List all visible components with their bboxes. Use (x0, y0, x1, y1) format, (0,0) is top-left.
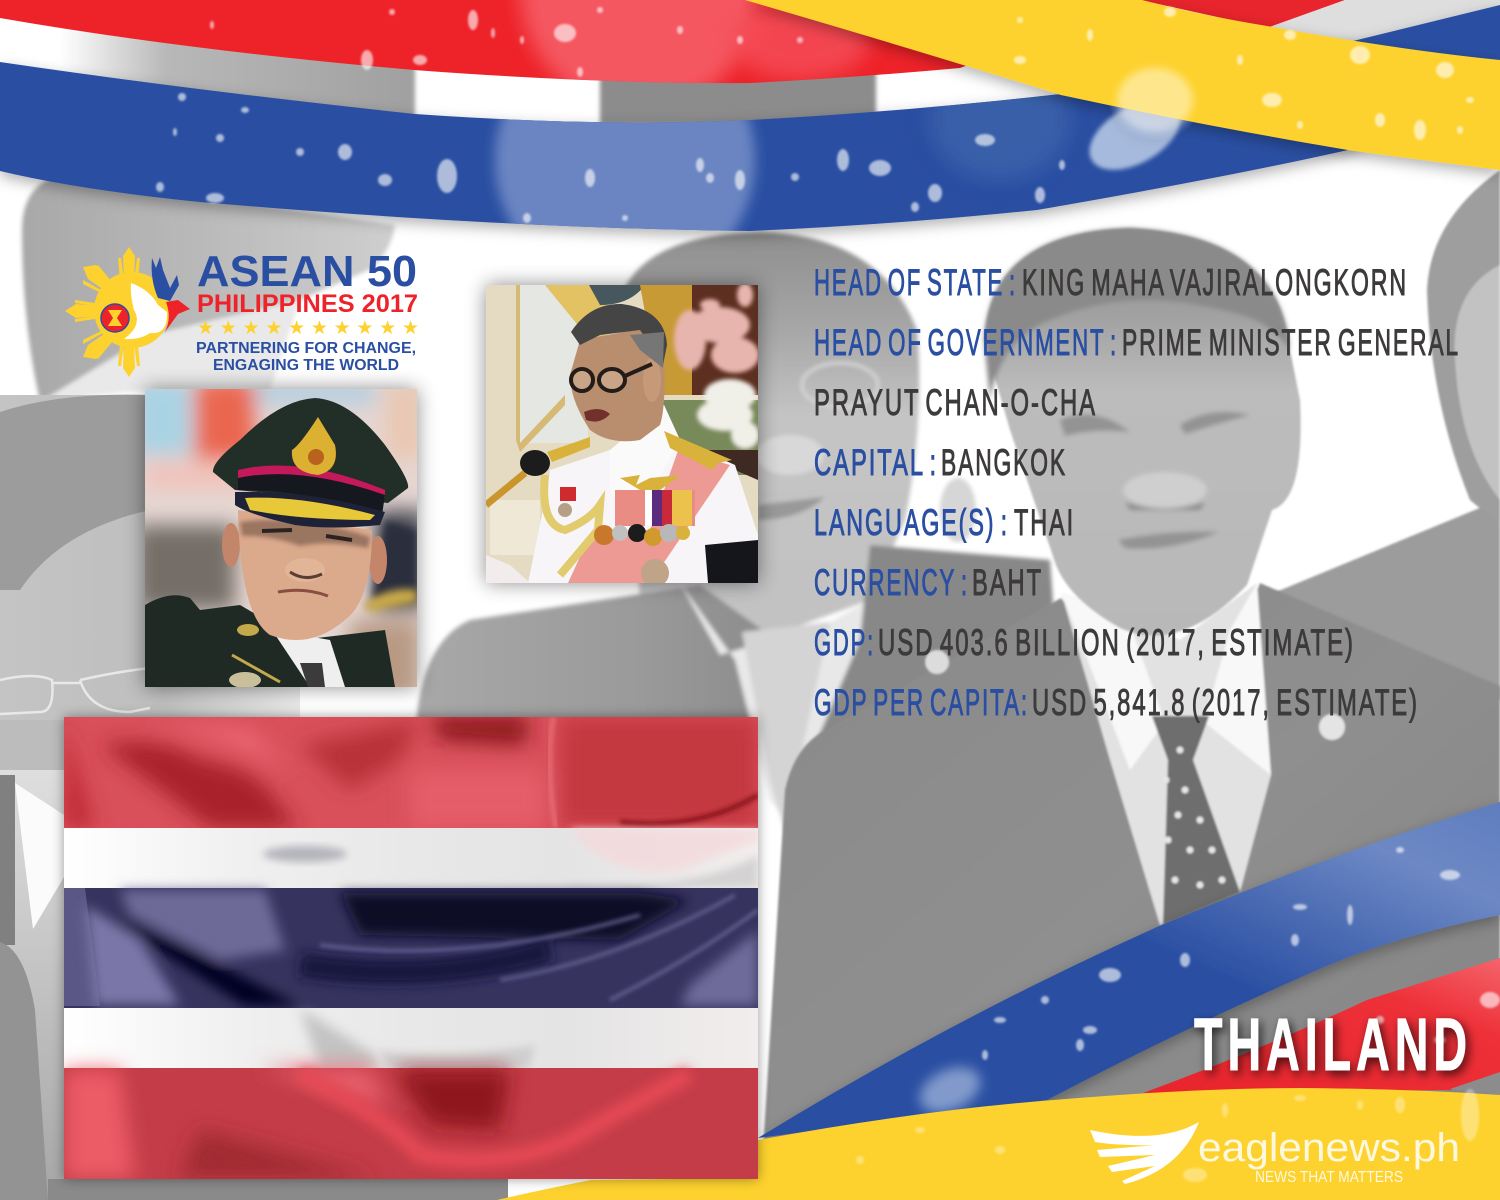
aiguillette (544, 475, 600, 575)
logo stars: ★★★★★★★★★★ (197, 317, 419, 339)
paper (486, 555, 530, 583)
neck and face (570, 325, 665, 441)
features (1060, 412, 1250, 549)
languages: THAI (1014, 502, 1075, 543)
red ribbon (0, 0, 966, 84)
microphone (520, 450, 550, 476)
cap (213, 398, 408, 503)
eaglenews.ph wordmark: eaglenews.ph (1198, 1126, 1460, 1170)
tie (1152, 716, 1240, 925)
confetti (156, 7, 1474, 223)
capital: BANGKOK (941, 442, 1067, 483)
icon: eagle wing (1090, 1122, 1199, 1184)
blue ribbon (758, 802, 1500, 1138)
black armband (705, 540, 758, 583)
Eagle News logo (1090, 1122, 1460, 1186)
head of government: HEAD OF GOVERNMENT : (814, 322, 1118, 363)
sash (568, 445, 730, 583)
logo text: Philippines 2017: PHILIPPINES 2017 (197, 290, 418, 318)
lower white stripe (64, 1008, 758, 1068)
left man with glasses (0, 395, 508, 1200)
head (984, 228, 1301, 636)
tagline: NEWS THAT MATTERS (1255, 1169, 1403, 1186)
fact sheet text (814, 262, 1460, 723)
ASEAN 50 logo (65, 247, 419, 377)
GDP per capita: GDP PER CAPITA: (814, 682, 1029, 723)
head of government name: PRAYUT CHAN-O-CHA (814, 382, 1097, 423)
GDP (814, 622, 1355, 663)
yellow ribbon (745, 0, 1500, 170)
far-left head behind ribbons (22, 30, 876, 402)
second man behind king photo (417, 232, 1060, 850)
photo: King Maha Vajiralongkorn (486, 283, 759, 587)
currency: CURRENCY : (814, 562, 969, 603)
yellow ribbon (497, 1088, 1500, 1200)
capital: CAPITAL : (814, 442, 938, 483)
suit (760, 583, 1500, 1200)
languages: LANGUAGE(S) : (814, 502, 1009, 543)
GDP: GDP: (814, 622, 875, 663)
main figure: Prime Minister portrait (760, 228, 1500, 1200)
face (222, 523, 240, 567)
logo text: ASEAN 50: ASEAN 50 (197, 247, 417, 296)
navy stripe (64, 888, 758, 1008)
logo text: tagline line 2: ENGAGING THE WORLD (213, 357, 399, 374)
medals (615, 490, 695, 526)
top ribbons (0, 0, 1500, 243)
currency: BAHT (972, 562, 1043, 603)
blue ribbon (0, 5, 1500, 243)
head of state: HEAD OF STATE : (814, 262, 1017, 303)
GDP per capita (814, 682, 1419, 723)
upper red stripe (64, 717, 758, 828)
head of state (814, 262, 1408, 303)
shirt (1061, 583, 1271, 925)
Thai flag (64, 717, 758, 1179)
bottom confetti (982, 847, 1500, 1060)
shoulder boards (664, 431, 732, 470)
right-hand neighbour (1260, 170, 1500, 700)
top-right red and white ribbons (1140, 0, 1345, 28)
uniform (528, 405, 758, 583)
lower red stripe (64, 1068, 758, 1179)
red ribbon (1143, 958, 1500, 1093)
icon: sun with dove (65, 247, 190, 377)
upper white stripe (64, 828, 758, 888)
logo text: tagline line 1: PARTNERING FOR CHANGE, (196, 340, 416, 357)
uniform (145, 595, 395, 687)
bottom ribbons (497, 802, 1500, 1200)
photo: Prime Minister in uniform (135, 380, 425, 700)
